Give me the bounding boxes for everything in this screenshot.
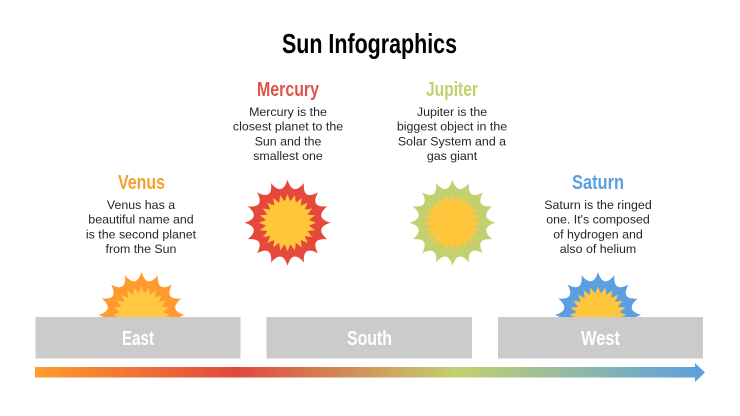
text block: Mercury description: Mercury is the <box>249 105 327 119</box>
text block: Venus description: Venus has a <box>107 198 175 212</box>
text block: Mercury description: smallest one <box>253 149 323 163</box>
heading: Mercury: Mercury <box>257 79 320 101</box>
heading: Venus: Venus <box>118 172 165 194</box>
panel: West: West <box>581 328 620 350</box>
panel: South: South <box>347 328 392 350</box>
text block: Venus description: from the Sun <box>106 242 177 256</box>
arrow: east to west gradient <box>35 363 705 382</box>
text block: Saturn description: also of helium <box>560 242 636 256</box>
text block: Jupiter description: biggest object in the <box>397 120 507 134</box>
panel: Venus text <box>86 172 197 256</box>
text block: Jupiter description: Solar System and a <box>398 134 506 148</box>
text block: Saturn description: Saturn is the ringed <box>544 198 652 212</box>
panel: East <box>36 317 240 358</box>
panel: Mercury text <box>233 79 343 163</box>
text block: Mercury description: closest planet to the <box>233 120 343 134</box>
text block: Jupiter description: gas giant <box>427 149 478 163</box>
panel: South <box>266 317 472 358</box>
panel: Saturn text <box>544 172 652 256</box>
text block: Venus description: beautiful name and <box>88 213 194 227</box>
text block: Saturn description: of hydrogen and <box>553 227 643 241</box>
title: Sun Infographics <box>282 28 457 59</box>
text block: Saturn description: one. It's composed <box>546 213 650 227</box>
heading: Jupiter: Jupiter <box>426 79 478 101</box>
text block: Jupiter description: Jupiter is the <box>417 105 487 119</box>
icon: Venus rising sun <box>98 272 184 317</box>
icon: Saturn setting sun <box>555 272 641 317</box>
panel: West <box>498 317 703 358</box>
text block: Venus description: is the second planet <box>86 227 197 241</box>
icon: Mercury sun <box>244 180 330 266</box>
text block: Mercury description: Sun and the <box>255 134 322 148</box>
icon: Jupiter sun <box>410 180 496 266</box>
heading: Saturn: Saturn <box>572 172 624 194</box>
panel: East: East <box>122 328 154 350</box>
panel: Jupiter text <box>397 79 507 163</box>
